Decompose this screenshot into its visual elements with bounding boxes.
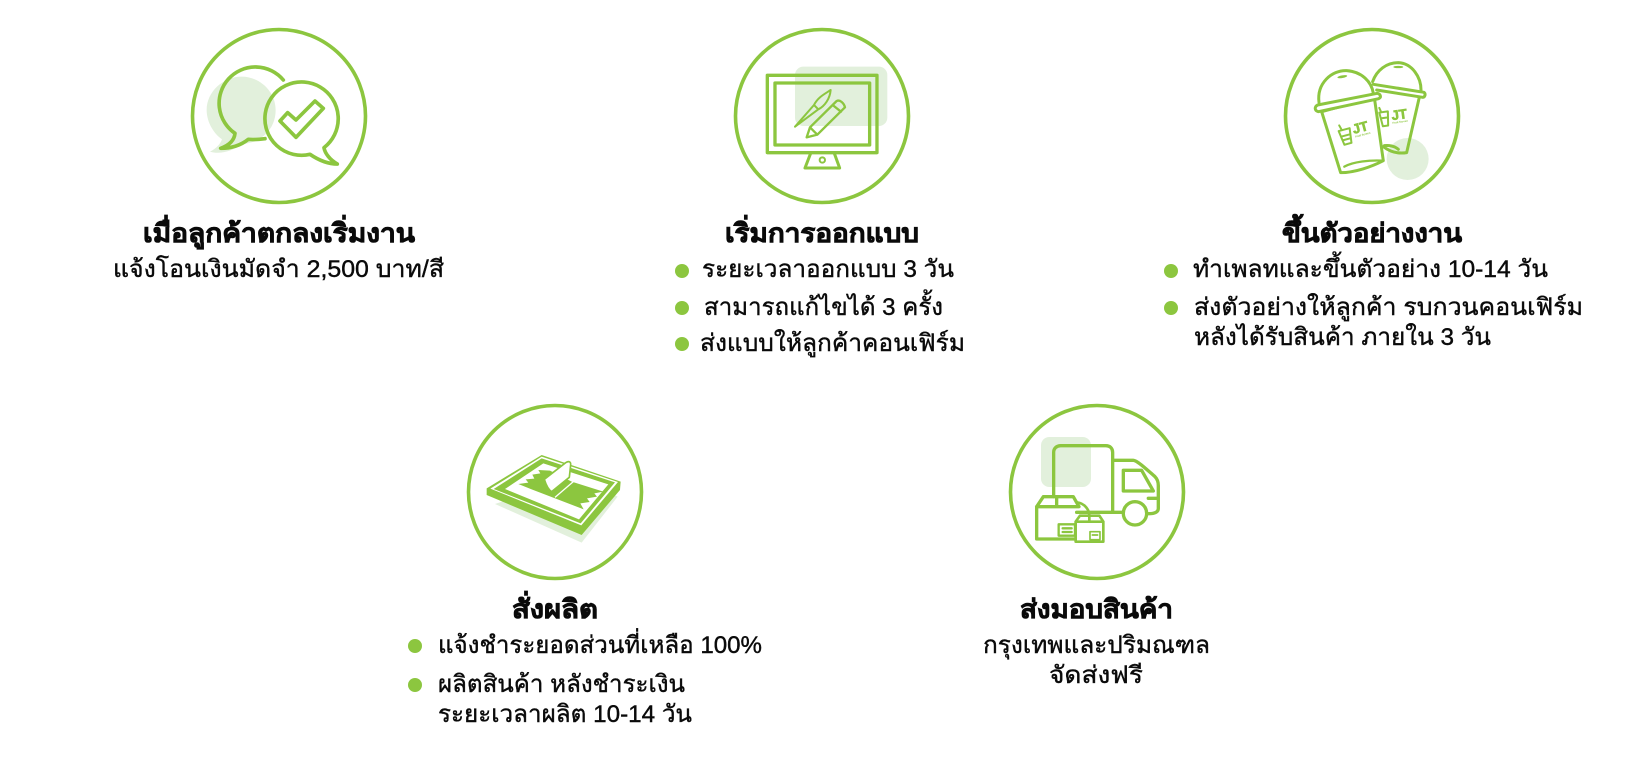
- icon: monitor with brush and pencil: [736, 30, 908, 202]
- icon: two branded cups: JT: [1351, 118, 1370, 137]
- heading: step 1: เมื่อลูกค้าตกลงเริ่มงาน: [143, 214, 415, 250]
- heading: step 2: เริ่มการออกแบบ: [725, 214, 919, 248]
- panel: step 4 production: [408, 406, 762, 728]
- list: production details: ระยะเวลาผลิต 10-14 วัน: [438, 701, 692, 728]
- list: production details: [408, 628, 762, 728]
- list: sample details: ทำเพลทและขึ้นตัวอย่าง 10-14 วัน: [1193, 251, 1548, 283]
- list: sample details: [1164, 251, 1583, 351]
- panel: step 1 agreement: [113, 30, 444, 283]
- icon: two branded cups: [1286, 30, 1458, 202]
- list: design details: สามารถแก้ไขได้ 3 ครั้ง: [704, 289, 943, 321]
- text: free delivery: จัดส่งฟรี: [1049, 662, 1143, 689]
- heading: step 3: ขึ้นตัวอย่างงาน: [1282, 213, 1462, 248]
- panel: step 3 sample: [1164, 30, 1583, 351]
- list: design details: ส่งแบบให้ลูกค้าคอนเฟิร์ม: [700, 329, 965, 358]
- icon: chat bubbles with check: [192, 30, 366, 202]
- icon: delivery truck and boxes: [1010, 406, 1184, 578]
- panel: step 5 delivery: [983, 406, 1210, 689]
- icon: two branded cups: Fruit Screen: [1355, 131, 1371, 139]
- icon: two branded cups: Fruit Screen: [1392, 119, 1408, 125]
- list: sample details: หลังได้รับสินค้า ภายใน 3 วัน: [1194, 323, 1491, 351]
- list: design details: ระยะเวลาออกแบบ 3 วัน: [702, 256, 954, 283]
- icon: silk screen frame with squeegee: [468, 406, 642, 578]
- heading: step 4: สั่งผลิต: [512, 590, 598, 624]
- list: design details: [675, 256, 965, 358]
- icon: two branded cups: JT: [1390, 106, 1408, 123]
- text: delivery area: กรุงเทพและปริมณฑล: [983, 632, 1210, 660]
- list: production details: แจ้งชำระยอดส่วนที่เหลือ 100%: [438, 628, 762, 659]
- list: sample details: ส่งตัวอย่างให้ลูกค้า รบกวนคอนเฟิร์ม: [1194, 293, 1583, 322]
- list: production details: ผลิตสินค้า หลังชำระเงิน: [438, 671, 685, 698]
- panel: step 2 design: [675, 30, 965, 358]
- heading: step 5: ส่งมอบสินค้า: [1020, 594, 1173, 624]
- text: deposit: แจ้งโอนเงินมัดจำ 2,500 บาท/สี: [113, 255, 444, 283]
